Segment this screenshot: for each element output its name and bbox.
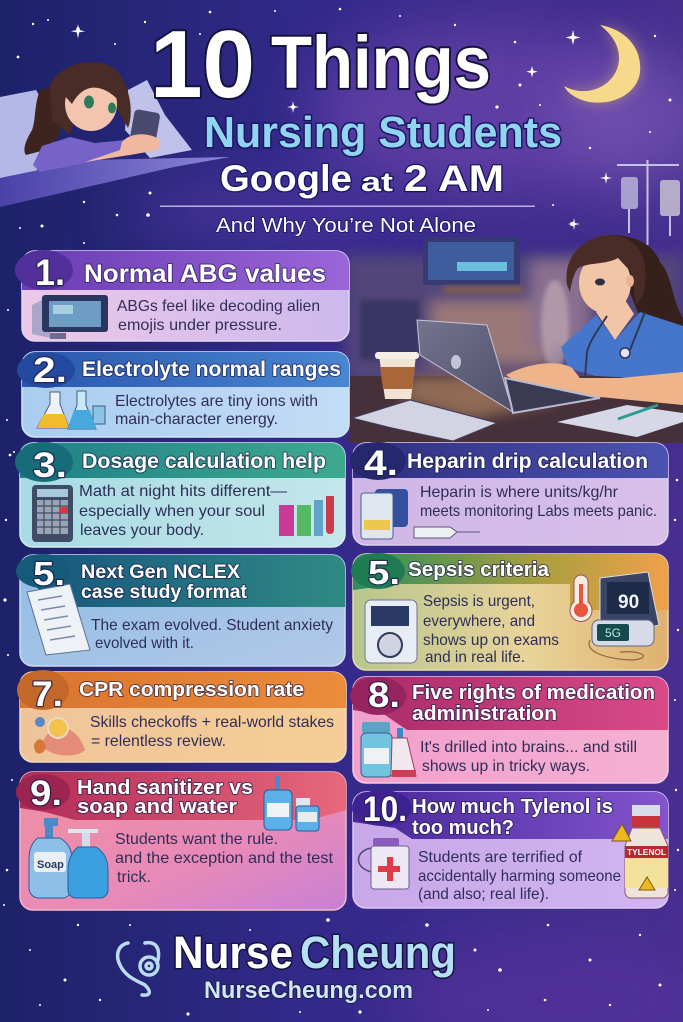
panel: 3 Dosage calculation help: especially when your soul	[79, 503, 265, 520]
illustration: open textbook	[352, 400, 497, 441]
icon: blood pressure monitor: 90	[618, 592, 639, 613]
panel: 10 How much Tylenol is too much?: 10.	[363, 790, 407, 829]
icon: blood pressure monitor: 5G	[605, 626, 621, 640]
heading: 10 Things	[150, 11, 491, 118]
icon: infusion pump	[365, 600, 417, 663]
panel: 1 Normal ABG values: emojis under pressure.	[118, 317, 282, 334]
panel: 10 How much Tylenol is too much?: (and also; real life).	[418, 886, 549, 903]
panel: 2 Electrolyte normal ranges: Electrolytes are tiny ions with	[115, 393, 318, 410]
panel: 3 Dosage calculation help: 3.	[33, 446, 67, 485]
icon: soap and sanitizer pumps	[29, 818, 108, 898]
icon: CPR hands	[34, 717, 85, 755]
footer brand: Nurse Cheung: Cheung	[300, 927, 456, 978]
panel: 7 CPR compression rate: CPR compression rate	[79, 679, 304, 701]
panel: 1 Normal ABG values: Normal ABG values	[84, 260, 326, 288]
icon: small sanitizer bottles	[264, 776, 319, 831]
panel: 3 Dosage calculation help: leaves your body.	[80, 522, 204, 539]
panel: 5 Next Gen NCLEX case study format	[16, 554, 345, 666]
illustration: nurse studying at laptop	[506, 235, 683, 405]
panel: 6 Sepsis criteria: and in real life.	[425, 649, 525, 666]
panel: 10 How much Tylenol is too much?: How much Tylenol is	[412, 796, 613, 818]
panel: 5 Next Gen NCLEX case study format: The exam evolved. Student anxiety	[91, 617, 333, 634]
panel: 2 Electrolyte normal ranges	[17, 351, 349, 437]
panel: 9 Hand sanitizer vs soap and water: trick.	[117, 869, 151, 886]
panel: 9 Hand sanitizer vs soap and water: and the exception and the test	[115, 850, 334, 867]
panel: 4 Heparin drip calculation: meets monitoring Labs meets panic.	[420, 503, 657, 520]
footer URL: NurseCheung.com	[204, 977, 413, 1004]
illustration: study desk	[350, 376, 683, 443]
icon: Tylenol bottle with warning: TYLENOL	[627, 848, 666, 857]
illustration: hospital room backdrop	[345, 237, 683, 385]
panel: 9 Hand sanitizer vs soap and water: 9.	[30, 774, 62, 813]
heading: Google at 2 AM: Google	[220, 158, 352, 199]
footer brand: Nurse Cheung	[173, 927, 456, 978]
icon: ABG analyzer	[32, 295, 108, 339]
panel: 9 Hand sanitizer vs soap and water: Hand sanitizer vs	[77, 777, 253, 799]
panel: 1 Normal ABG values	[15, 250, 349, 341]
panel: 6 Sepsis criteria: 5.	[368, 554, 400, 591]
heading: Google at 2 AM: 2 AM	[404, 158, 504, 199]
heading: 10 Things: 10	[150, 11, 255, 118]
panel: 8 Five rights of medication administration: It's drilled into brains... and still	[420, 739, 637, 756]
panel: 8 Five rights of medication administration: 8.	[368, 676, 400, 715]
panel: 3 Dosage calculation help: Math at night hits different—	[79, 483, 287, 500]
panel: 6 Sepsis criteria: Sepsis criteria	[408, 559, 550, 581]
heading: Google at 2 AM	[220, 158, 504, 199]
panel: 4 Heparin drip calculation: Heparin drip calculation	[407, 450, 648, 473]
panel: 5 Next Gen NCLEX case study format: Next Gen NCLEX	[81, 562, 240, 583]
icon: Tylenol bottle with warning	[612, 805, 668, 898]
panel: 10 How much Tylenol is too much?	[352, 790, 668, 908]
panel: 4 Heparin drip calculation: 4.	[364, 444, 398, 483]
panel: 8 Five rights of medication administration: administration	[412, 703, 557, 725]
panel: 1 Normal ABG values: 1.	[35, 252, 65, 293]
icon: blood pressure monitor	[589, 572, 659, 660]
icon: thermometer	[570, 575, 592, 621]
icon: case study document	[27, 584, 90, 655]
panel: 9 Hand sanitizer vs soap and water: Students want the rule.	[115, 831, 278, 848]
panel: 2 Electrolyte normal ranges: Electrolyte normal ranges	[82, 358, 341, 381]
panel: 9 Hand sanitizer vs soap and water	[16, 772, 346, 910]
heading: Google at 2 AM: at	[361, 167, 393, 197]
icon: heparin bag and syringe	[361, 489, 480, 539]
illustration: open laptop	[417, 320, 600, 413]
icon: medication bottles	[361, 722, 416, 777]
heading: Nursing Students: Nursing Students	[204, 108, 562, 157]
illustration: girl in bed with phone	[0, 62, 230, 207]
panel: 10 How much Tylenol is too much?: too much?	[412, 817, 514, 839]
panel: 3 Dosage calculation help	[15, 442, 345, 547]
panel: 4 Heparin drip calculation: Heparin is where units/kg/hr	[420, 484, 619, 501]
heading: 10 Things: Things	[271, 21, 491, 104]
icon: calculator	[32, 485, 73, 542]
panel: 8 Five rights of medication administration: Five rights of medication	[412, 682, 655, 704]
panel: 6 Sepsis criteria: Sepsis is urgent,	[423, 593, 535, 610]
icon: first aid mug	[358, 838, 409, 889]
panel: 7 CPR compression rate: = relentless review.	[91, 733, 226, 750]
panel: 7 CPR compression rate: Skills checkoffs + real-world stakes	[90, 714, 334, 731]
panel: 9 Hand sanitizer vs soap and water: soap and water	[77, 796, 237, 818]
panel: 5 Next Gen NCLEX case study format: 5.	[33, 555, 65, 592]
panel: 6 Sepsis criteria: everywhere, and	[423, 613, 535, 630]
panel: 10 How much Tylenol is too much?: accidentally harming someone	[418, 868, 621, 885]
icon: crescent moon	[564, 25, 640, 103]
icon: soap and sanitizer pumps: Soap	[37, 859, 64, 871]
footer logo: stethoscope icon	[118, 943, 159, 995]
panel: 8 Five rights of medication administration	[350, 676, 668, 783]
illustration: notebook and pen	[557, 405, 683, 437]
panel: 6 Sepsis criteria: shows up on exams	[423, 632, 559, 649]
panel: 5 Next Gen NCLEX case study format: case study format	[81, 582, 248, 603]
subtitle: And Why You’re Not Alone	[216, 215, 476, 237]
panel: 4 Heparin drip calculation	[350, 442, 668, 545]
panel: 8 Five rights of medication administration: shows up in tricky ways.	[422, 758, 590, 775]
illustration: IV bags on pole	[617, 160, 680, 245]
panel: 10 How much Tylenol is too much?: Students are terrified of	[418, 849, 583, 866]
panel: 2 Electrolyte normal ranges: 2.	[33, 351, 67, 390]
panel: 6 Sepsis criteria	[351, 553, 668, 670]
panel: 7 CPR compression rate	[17, 670, 346, 762]
illustration: coffee cup	[375, 352, 419, 399]
icon: chemistry flasks	[37, 391, 105, 429]
panel: 5 Next Gen NCLEX case study format: evolved with it.	[95, 635, 194, 652]
panel: 1 Normal ABG values: ABGs feel like decoding alien	[117, 298, 320, 315]
panel: 7 CPR compression rate: 7.	[32, 675, 63, 714]
footer brand: Nurse Cheung: Nurse	[173, 927, 293, 978]
panel: 3 Dosage calculation help: Dosage calculation help	[82, 450, 326, 473]
panel: 2 Electrolyte normal ranges: main-character energy.	[115, 411, 278, 428]
icon: medication vials	[279, 496, 334, 536]
